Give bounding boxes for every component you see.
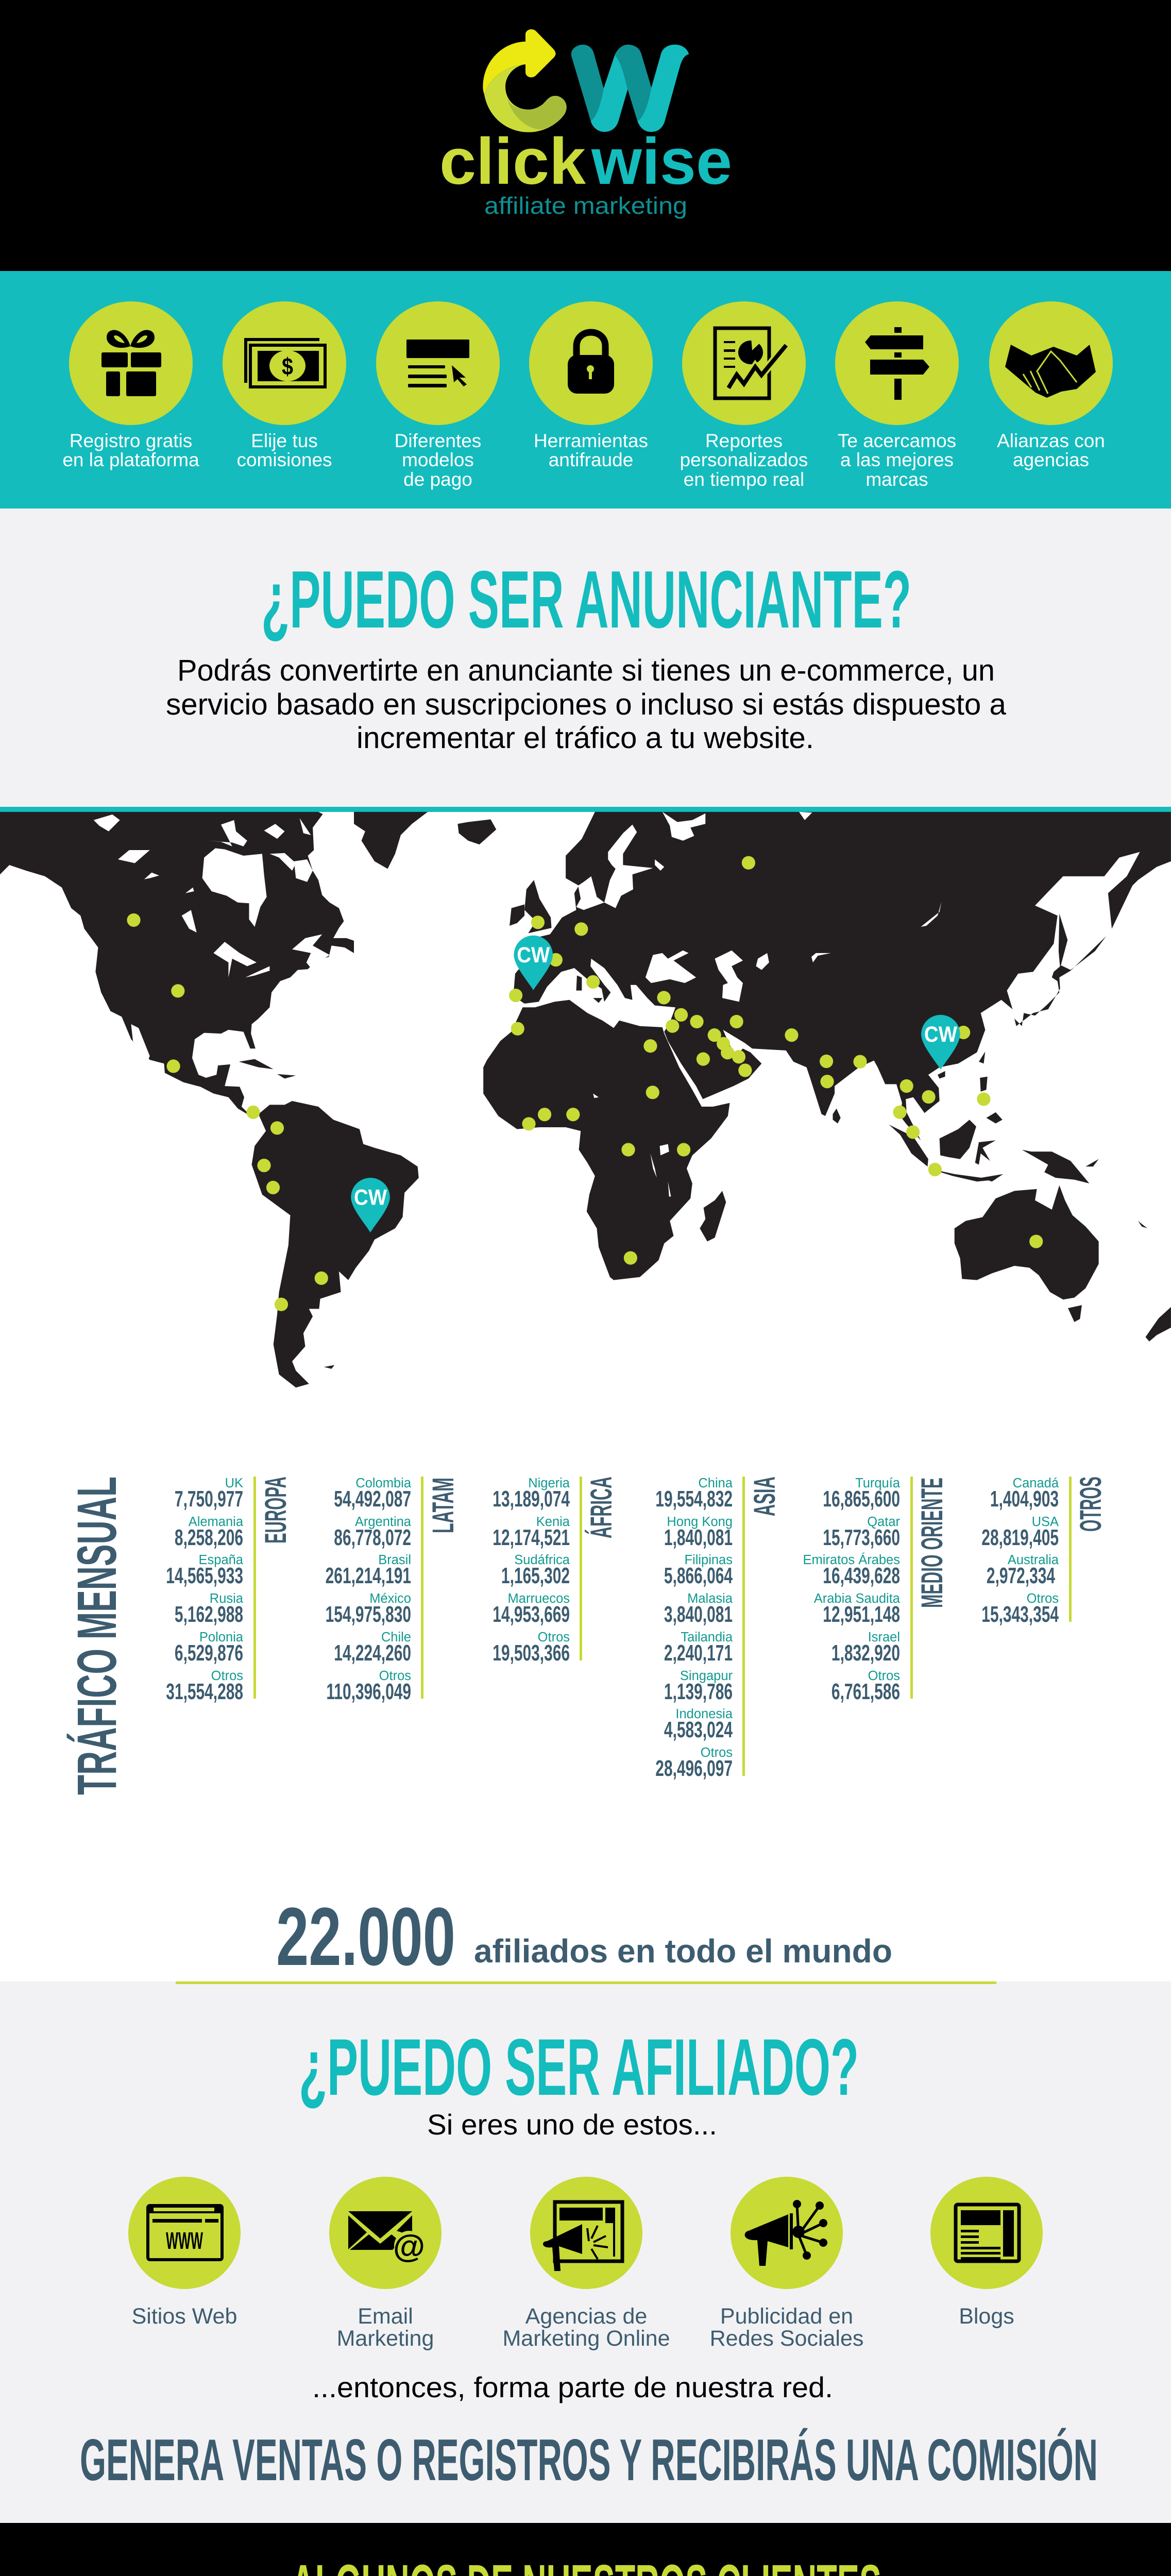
column: asia <box>655 1476 782 1781</box>
column: otros: 15,343,354 <box>981 1601 1059 1626</box>
column: asia: 28,496,097 <box>655 1755 733 1781</box>
column: otros: 28,819,405 <box>981 1524 1059 1550</box>
column: latam: Brasil <box>378 1553 411 1567</box>
column: europa: EUROPA <box>259 1477 293 1544</box>
label: Registro gratis <box>70 430 192 451</box>
header: logo band <box>0 0 1171 271</box>
column: africa: 13,189,074 <box>493 1486 570 1511</box>
benefit: reportes personalizados <box>680 301 808 490</box>
icon: banknotes <box>244 338 325 387</box>
column: medio oriente: 15,773,660 <box>823 1524 900 1550</box>
benefit: registro gratis <box>62 301 199 470</box>
type: agencias de marketing online <box>502 2177 670 2351</box>
column: europa: 5,162,988 <box>175 1601 243 1626</box>
label: Diferentes <box>395 430 481 451</box>
column: africa: 12,174,521 <box>493 1524 570 1550</box>
column: asia: 1,139,786 <box>664 1679 733 1704</box>
benefit: elije tus comisiones <box>223 301 346 470</box>
column: otros: USA <box>1032 1515 1059 1529</box>
column: africa: 14,953,669 <box>493 1601 570 1626</box>
column: europa: UK <box>225 1476 243 1490</box>
icon: banknotes: $ <box>282 353 293 380</box>
column: otros <box>981 1476 1108 1626</box>
label: Marketing <box>337 2326 434 2351</box>
icon: megaphone network <box>745 2200 827 2266</box>
column: otros: 2,972,334 <box>987 1563 1055 1588</box>
heading: trafico mensual: TRÁFICO MENSUAL <box>65 1477 128 1795</box>
column: medio oriente: 1,832,920 <box>831 1640 900 1665</box>
label: Te acercamos <box>838 430 956 451</box>
column: latam: Otros <box>379 1669 411 1683</box>
label: personalizados <box>680 449 808 470</box>
column: europa: Rusia <box>210 1591 244 1606</box>
type: email marketing <box>329 2177 442 2351</box>
label: Blogs <box>959 2304 1014 2329</box>
label: agencias <box>1013 449 1089 470</box>
column: europa: 31,554,288 <box>166 1679 243 1704</box>
text block <box>166 654 1007 755</box>
column: medio oriente: Emiratos Árabes <box>803 1552 900 1567</box>
column: latam <box>326 1476 460 1704</box>
column: medio oriente <box>803 1476 949 1704</box>
benefit: alianzas con agencias <box>989 301 1113 470</box>
column: europa: Polonia <box>199 1630 244 1645</box>
icon: browser: WWW <box>166 2227 203 2254</box>
statistic: 22.000 afiliados: afiliados en todo el mundo <box>474 1933 892 1970</box>
type: publicidad en redes sociales <box>710 2177 863 2351</box>
column: asia: 4,583,024 <box>664 1717 733 1742</box>
column: medio oriente: Israel <box>868 1630 900 1645</box>
statistic: 22.000 afiliados <box>276 1890 892 1982</box>
column: europa: 6,529,876 <box>175 1640 243 1665</box>
column: europa: Otros <box>211 1669 243 1683</box>
column: otros: 1,404,903 <box>990 1486 1059 1511</box>
label: en tiempo real <box>684 469 804 490</box>
intro text: Si eres uno de estos... <box>427 2108 717 2141</box>
logo wordmark <box>439 125 732 198</box>
column: asia: 3,840,081 <box>664 1601 733 1626</box>
text block: incrementar el tráfico a tu website. <box>357 721 814 755</box>
column: otros: Canadá <box>1013 1476 1059 1490</box>
column: europa <box>166 1476 293 1704</box>
label: Agencias de <box>525 2304 647 2329</box>
map pin: brazil <box>351 1178 390 1232</box>
column: africa: Otros <box>538 1630 570 1645</box>
column: latam: 110,396,049 <box>326 1679 411 1704</box>
label: de pago <box>403 469 472 490</box>
column: medio oriente: 6,761,586 <box>831 1679 900 1704</box>
column: africa: Kenia <box>536 1515 570 1529</box>
seas and lakes of north america <box>94 815 330 1060</box>
label: Herramientas <box>534 430 648 451</box>
column: latam: 14,224,260 <box>334 1640 411 1665</box>
column: asia: Tailandia <box>681 1630 733 1645</box>
column: africa: 19,503,366 <box>493 1640 570 1665</box>
column: medio oriente: Arabia Saudita <box>814 1591 901 1606</box>
logo wordmark: click <box>439 125 586 198</box>
map pin: spain: CW <box>517 943 550 967</box>
column: asia: 2,240,171 <box>664 1640 733 1665</box>
map pin: china: CW <box>924 1022 957 1046</box>
icon: report with chart <box>715 328 786 398</box>
type: blogs <box>930 2177 1043 2329</box>
panel: puedo ser anunciante <box>0 509 1171 812</box>
closing text: ...entonces, forma parte de nuestra red. <box>312 2371 833 2403</box>
label: Publicidad en <box>720 2304 853 2329</box>
column: asia: China <box>698 1476 733 1490</box>
column: otros: Australia <box>1008 1553 1059 1567</box>
icon: padlock <box>568 332 614 394</box>
column: asia: ASIA <box>748 1477 782 1516</box>
icon: handshake <box>1005 345 1096 398</box>
column: latam: Argentina <box>355 1515 412 1529</box>
icon: envelope with at sign <box>348 2211 425 2264</box>
column: otros: OTROS <box>1074 1477 1108 1532</box>
panel: benefits band <box>0 271 1171 509</box>
logo tagline: affiliate marketing <box>484 192 687 219</box>
column: medio oriente: 16,439,628 <box>823 1563 900 1588</box>
world map <box>0 812 1171 1387</box>
column: asia: Indonesia <box>675 1707 733 1721</box>
label: Redes Sociales <box>710 2326 863 2351</box>
column: asia: Filipinas <box>684 1553 733 1567</box>
column: africa: Nigeria <box>528 1476 570 1490</box>
label: marcas <box>865 469 928 490</box>
label: antifraude <box>549 449 633 470</box>
icon: gift <box>101 330 161 396</box>
column: medio oriente: MEDIO ORIENTE <box>915 1478 949 1608</box>
column: europa: Alemania <box>189 1515 244 1529</box>
label: comisiones <box>236 449 332 470</box>
benefit: diferentes modelos de pago <box>376 301 500 490</box>
column: latam: 261,214,191 <box>326 1563 411 1588</box>
inland seas and lakes of the old world <box>576 812 941 1196</box>
column: europa: 8,258,206 <box>175 1524 243 1550</box>
icon: envelope with at sign: @ <box>393 2229 425 2264</box>
label: Sitios Web <box>132 2304 237 2329</box>
column: asia: Singapur <box>680 1669 733 1683</box>
label: Email <box>358 2304 413 2329</box>
logo symbol: CW <box>483 29 689 132</box>
panel: clientes <box>0 2523 1171 2576</box>
label: en la plataforma <box>62 449 199 470</box>
benefit: herramientas antifraude <box>529 301 653 470</box>
icon: newspaper <box>956 2205 1019 2261</box>
column: asia: Malasia <box>687 1591 733 1606</box>
column: latam: Chile <box>381 1630 411 1645</box>
column: africa: ÁFRICA <box>585 1477 618 1538</box>
type: sitios web <box>128 2177 241 2329</box>
column: europa: 14,565,933 <box>166 1563 243 1588</box>
column: asia: Otros <box>701 1745 733 1760</box>
column: latam: 54,492,087 <box>334 1486 411 1511</box>
column: medio oriente: 16,865,600 <box>823 1486 900 1511</box>
column: otros: Otros <box>1027 1591 1059 1606</box>
column: europa: 7,750,977 <box>175 1486 243 1511</box>
column: medio oriente: Qatar <box>867 1515 901 1529</box>
column: latam: Colombia <box>355 1476 412 1490</box>
column: asia: 19,554,832 <box>655 1486 733 1511</box>
column: asia: Hong Kong <box>667 1515 733 1529</box>
icon: browser <box>148 2206 222 2260</box>
column: africa: Marruecos <box>508 1591 570 1606</box>
column: africa <box>493 1476 618 1665</box>
label: modelos <box>402 449 474 470</box>
statistic: 22.000 afiliados: 22.000 <box>276 1890 455 1982</box>
column: latam: 154,975,830 <box>326 1601 411 1626</box>
column: medio oriente: Turquía <box>855 1476 901 1490</box>
column: asia: 5,866,064 <box>664 1563 733 1588</box>
column: europa: España <box>199 1553 244 1567</box>
benefit: te acercamos a las mejores marcas <box>835 301 959 490</box>
map pin: china <box>921 1015 960 1070</box>
traffic location dots <box>127 856 1043 1311</box>
label: Alianzas con <box>997 430 1105 451</box>
map pin: brazil: CW <box>354 1185 387 1209</box>
icon: poster with megaphone <box>543 2202 622 2271</box>
label: Reportes <box>705 430 783 451</box>
column: latam: 86,778,072 <box>334 1524 411 1550</box>
icon: signpost <box>865 327 929 400</box>
panel: puedo ser afiliado <box>0 1981 1171 2523</box>
column: medio oriente: 12,951,148 <box>823 1601 900 1626</box>
land: americas, greenland, iceland <box>0 812 496 1387</box>
land: eurasia, africa, oceania <box>483 812 1171 1342</box>
text block: Podrás convertirte en anunciante si tienes un e-commerce, un <box>177 654 995 687</box>
label: Elije tus <box>251 430 318 451</box>
column: latam: LATAM <box>427 1478 460 1533</box>
logo wordmark: wise <box>591 125 732 198</box>
text block: servicio basado en suscripciones o incluso si estás dispuesto a <box>166 688 1007 721</box>
column: africa: Sudáfrica <box>514 1553 570 1567</box>
column: africa: 1,165,302 <box>501 1563 570 1588</box>
label: Marketing Online <box>502 2326 670 2351</box>
icon: ad format with cursor <box>406 340 469 387</box>
column: asia: 1,840,081 <box>664 1524 733 1550</box>
label: a las mejores <box>840 449 954 470</box>
map pin: spain <box>514 936 553 990</box>
column: medio oriente: Otros <box>868 1669 900 1683</box>
column: latam: México <box>369 1591 411 1606</box>
